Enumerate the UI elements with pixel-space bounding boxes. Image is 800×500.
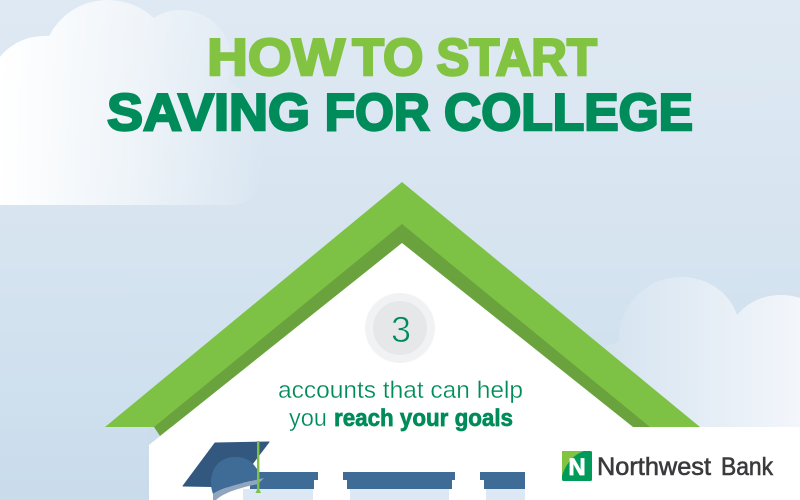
- house wall: white: [149, 243, 800, 500]
- logo square: [562, 451, 592, 481]
- house: [105, 182, 800, 500]
- title line 2: SAVING: [107, 84, 310, 142]
- column 2 capital: [343, 472, 455, 489]
- title line 2: FOR: [325, 84, 430, 142]
- subtitle line 1: accounts that can help: [278, 377, 523, 404]
- badge inner disc: [373, 301, 427, 355]
- subtitle text: [278, 377, 523, 432]
- count badge: [365, 293, 435, 363]
- column 2 shaft: [350, 489, 449, 500]
- title: [107, 29, 693, 142]
- title line 2: [107, 84, 693, 142]
- logo mark: [562, 451, 592, 481]
- cap board: [183, 442, 269, 487]
- cap tassel: [257, 441, 259, 490]
- title line 2: COLLEGE: [444, 84, 693, 142]
- logo wordmark: Northwest: [597, 453, 711, 481]
- subtitle you: you: [289, 405, 327, 432]
- cloud: right: [600, 277, 800, 428]
- cap head: [211, 457, 264, 494]
- column 1 capital: [250, 472, 318, 489]
- columns: [243, 472, 525, 500]
- title line 1: [207, 29, 597, 87]
- column 1 shaft: [243, 489, 313, 500]
- subtitle bold: reach your goals: [334, 405, 513, 432]
- logo wordmark: Bank: [721, 453, 773, 481]
- logo wordmark: [597, 453, 773, 481]
- cloud: top left: [0, 0, 266, 205]
- column 3 shaft: [486, 489, 525, 500]
- column 3 capital: [480, 472, 525, 489]
- number 3: 3: [391, 309, 411, 350]
- cap head shadow: [213, 478, 264, 500]
- logo letter N: N: [568, 454, 586, 481]
- title line 1: START: [436, 29, 597, 87]
- title line 1: TO: [352, 29, 423, 87]
- tassel tip: [256, 487, 261, 493]
- roof: left underside sky gap: [105, 427, 160, 445]
- badge outer ring: [365, 293, 435, 363]
- title line 1: HOW: [207, 29, 346, 87]
- icon: graduation cap: [183, 441, 269, 500]
- roof: dark green band: [154, 224, 650, 436]
- logo light swoosh: [562, 451, 584, 476]
- roof: outer green: [105, 182, 700, 427]
- logo: Northwest Bank: [562, 451, 773, 481]
